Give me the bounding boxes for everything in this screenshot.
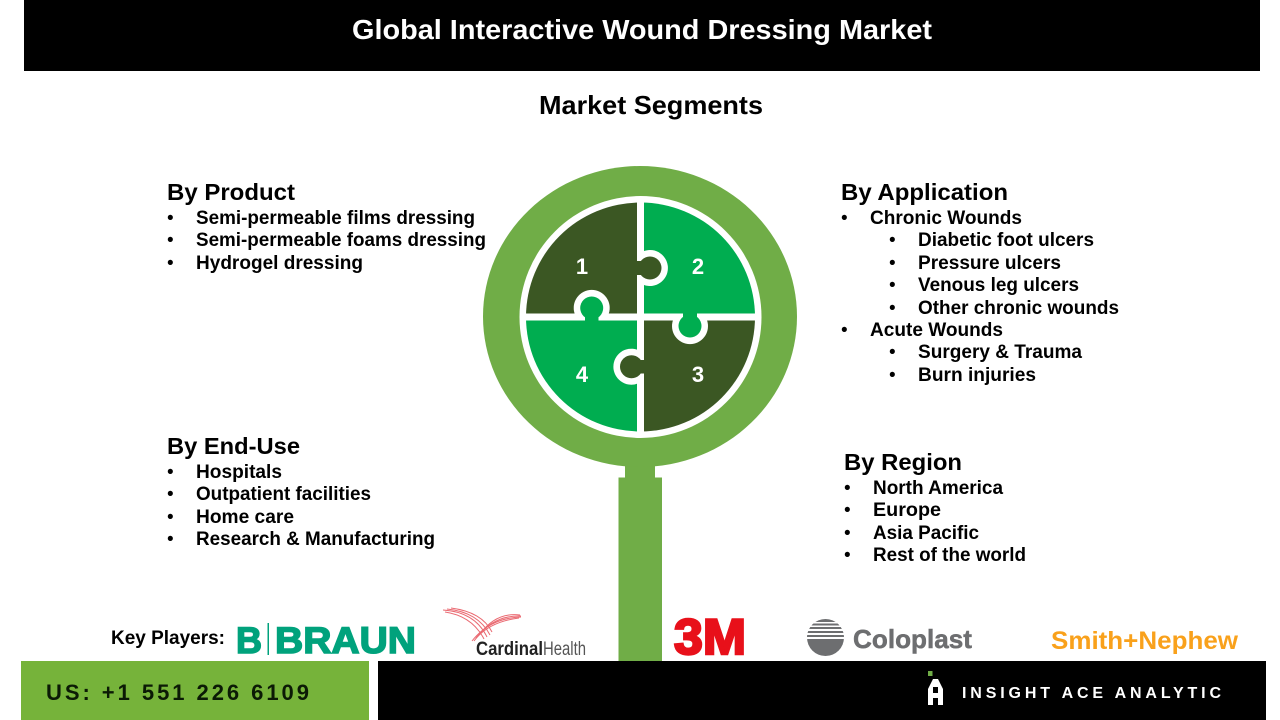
magnifying glass puzzle	[483, 166, 797, 467]
panel: by region: •	[844, 478, 851, 499]
panel: by application: Chronic Wounds	[870, 208, 1022, 229]
panel: by application: By Application	[841, 179, 1008, 205]
panel: by region: North America	[873, 478, 1003, 499]
panel: by end-use: Home care	[196, 507, 294, 528]
panel: by application: •	[889, 253, 896, 274]
title banner	[24, 0, 1260, 71]
key players label: Key Players:	[111, 628, 225, 649]
panel: by application: Acute Wounds	[870, 320, 1003, 341]
puzzle numbers	[576, 254, 704, 387]
heading: market segments: Market Segments	[539, 90, 763, 120]
icon: insight ace logo	[928, 671, 943, 705]
panel: by application: Pressure ulcers	[918, 253, 1061, 274]
logo: coloplast	[806, 619, 972, 656]
panel: by region: •	[844, 523, 851, 544]
panel: by region: Europe	[873, 500, 941, 521]
panel: by end-use: •	[167, 484, 174, 505]
panel: by region: Asia Pacific	[873, 523, 979, 544]
magnifying glass handle	[618, 460, 662, 662]
panel: by application: Other chronic wounds	[918, 298, 1119, 319]
panel: by end-use: Research & Manufacturing	[196, 529, 435, 550]
panel: by application: •	[889, 342, 896, 363]
logo: cardinal health: Cardinal	[476, 639, 543, 660]
panel: by product: Hydrogel dressing	[196, 253, 363, 274]
logo: cardinal health: Health	[543, 639, 586, 660]
logo: coloplast: Coloplast	[853, 624, 972, 654]
panel: by application: •	[841, 320, 848, 341]
panel: by product: Semi-permeable foams dressing	[196, 230, 486, 251]
contact bar: US: +1 551 226 6109	[46, 680, 309, 705]
panel: by region: •	[844, 500, 851, 521]
panel: by application: Surgery & Trauma	[918, 342, 1082, 363]
panel: by application: Venous leg ulcers	[918, 275, 1079, 296]
title banner: Global Interactive Wound Dressing Market	[352, 14, 932, 45]
panel: by region: •	[844, 545, 851, 566]
puzzle numbers: 4	[576, 362, 589, 387]
panel: by end-use: •	[167, 529, 174, 550]
panel: by end-use: By End-Use	[167, 433, 300, 459]
logo: 3m: 3M	[674, 609, 746, 665]
panel: by end-use: •	[167, 507, 174, 528]
puzzle numbers: 2	[692, 254, 704, 279]
brand bar	[378, 661, 1266, 720]
panel: by application: Diabetic foot ulcers	[918, 230, 1094, 251]
logo: cardinal health	[443, 608, 586, 660]
panel: by end-use: Outpatient facilities	[196, 484, 371, 505]
panel: by application: Burn injuries	[918, 365, 1036, 386]
logo: b braun: BRAUN	[275, 620, 416, 661]
puzzle pieces	[520, 197, 761, 438]
logo: b braun: B	[236, 620, 262, 661]
panel: by product: •	[167, 208, 174, 229]
panel: by application: •	[889, 275, 896, 296]
panel: by product	[167, 179, 486, 274]
logo: smith and nephew: Smith+Nephew	[1051, 627, 1239, 655]
panel: by application: •	[889, 230, 896, 251]
panel: by application: •	[841, 208, 848, 229]
panel: by product: By Product	[167, 179, 295, 205]
panel: by region	[844, 449, 1026, 566]
lens ring	[483, 166, 797, 467]
panel: by product: •	[167, 230, 174, 251]
panel: by region: By Region	[844, 449, 962, 475]
panel: by application	[841, 179, 1119, 386]
brand bar: INSIGHT ACE ANALYTIC	[962, 685, 1221, 702]
panel: by end-use: •	[167, 462, 174, 483]
puzzle numbers: 1	[576, 254, 588, 279]
panel: by application: •	[889, 298, 896, 319]
puzzle numbers: 3	[692, 362, 704, 387]
panel: by product: •	[167, 253, 174, 274]
panel: by region: Rest of the world	[873, 545, 1026, 566]
panel: by end-use: Hospitals	[196, 462, 282, 483]
panel: by end-use	[167, 433, 435, 550]
panel: by product: Semi-permeable films dressing	[196, 208, 475, 229]
panel: by application: •	[889, 365, 896, 386]
contact bar	[21, 661, 369, 720]
